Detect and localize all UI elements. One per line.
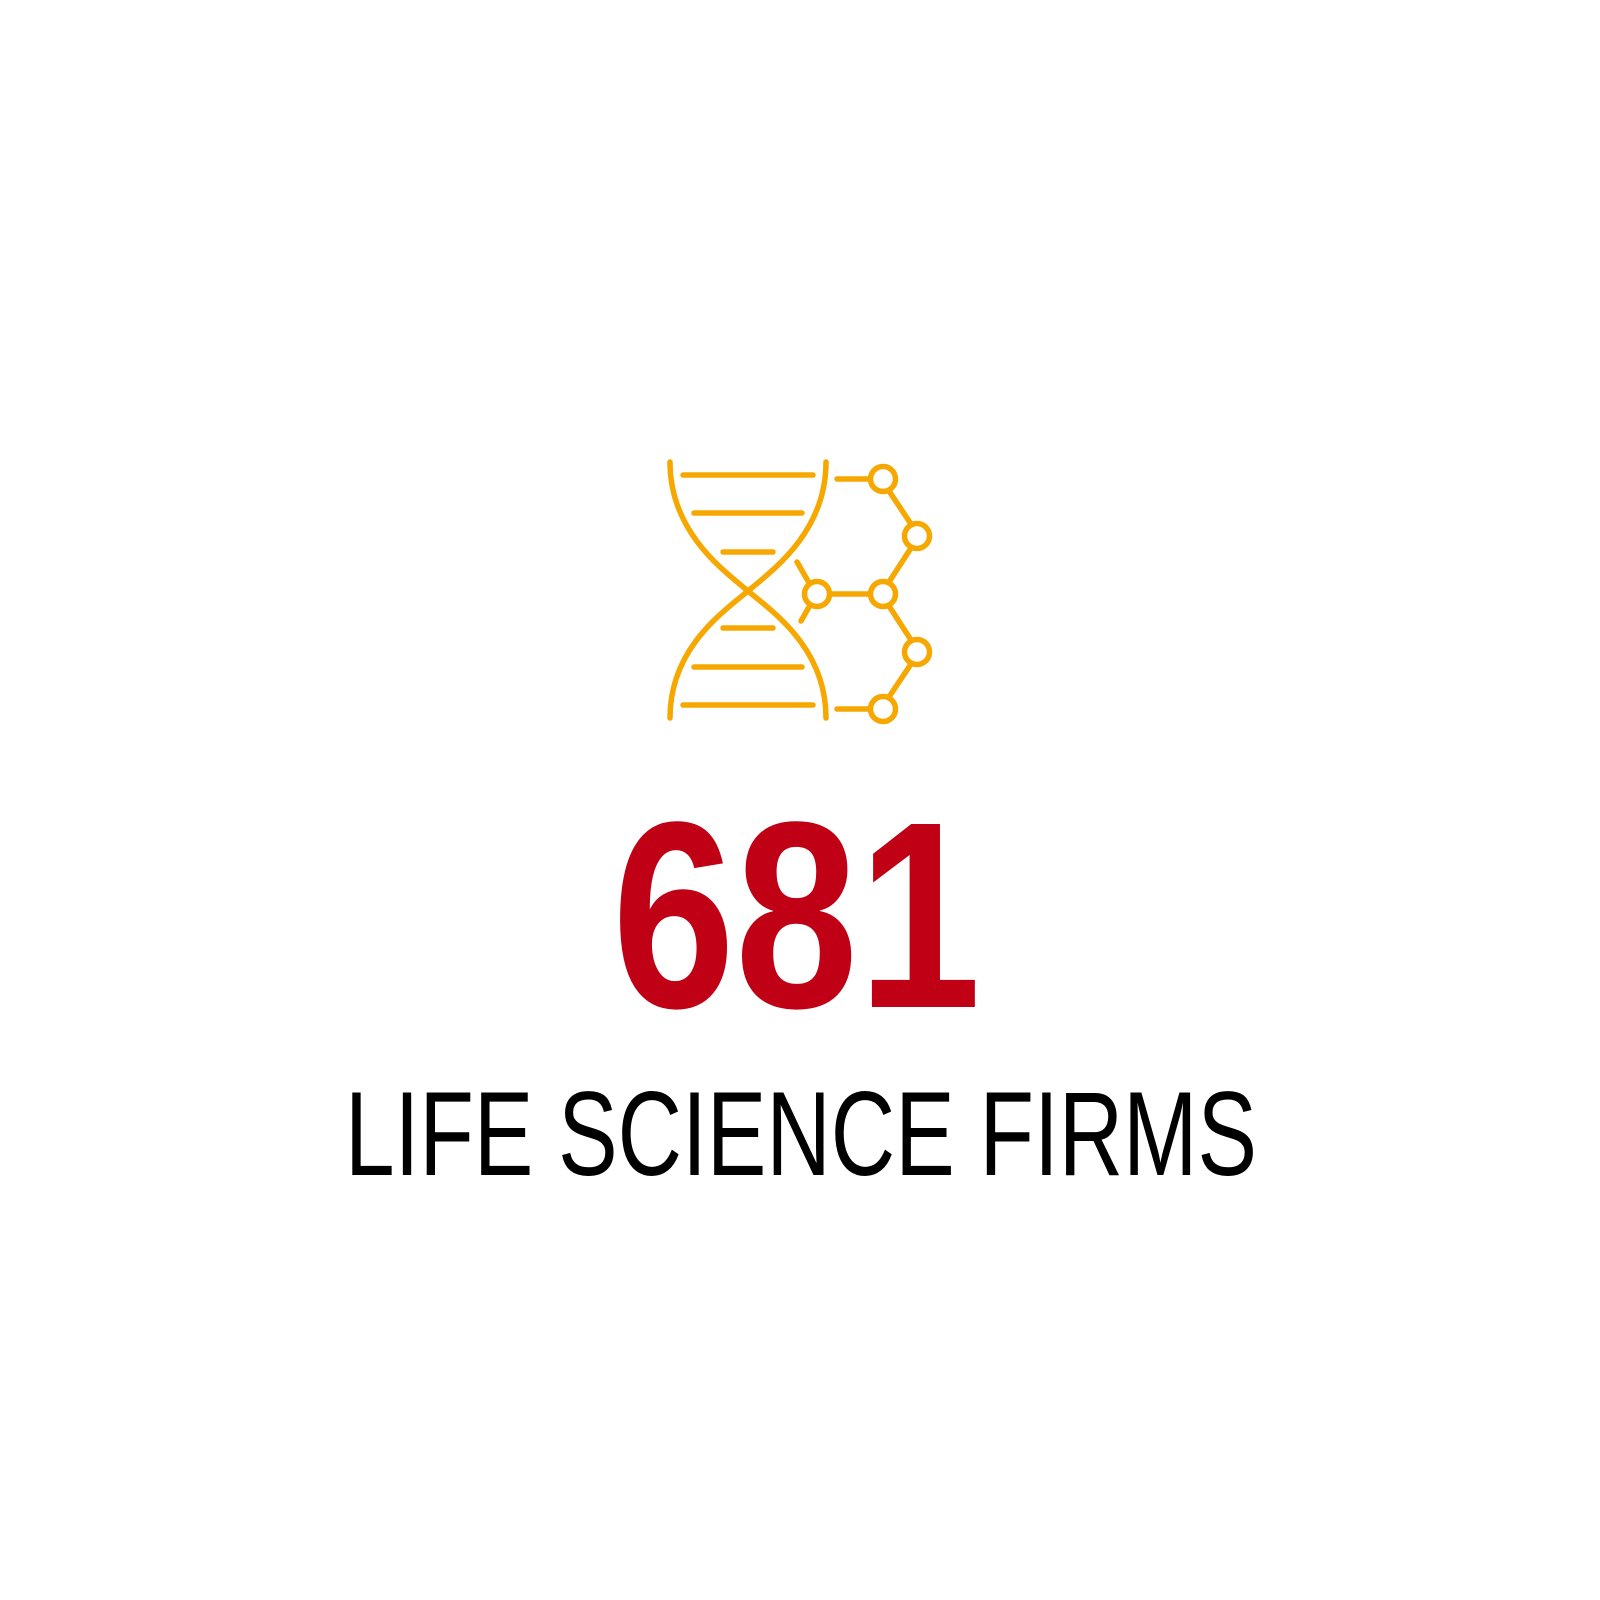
icon: DNA helix with molecule — [670, 462, 930, 722]
big number: 681 — [612, 767, 981, 1064]
label: LIFE SCIENCE FIRMS — [345, 1067, 1257, 1201]
icon: DNA strands — [670, 462, 826, 718]
icon: molecule — [797, 466, 930, 722]
